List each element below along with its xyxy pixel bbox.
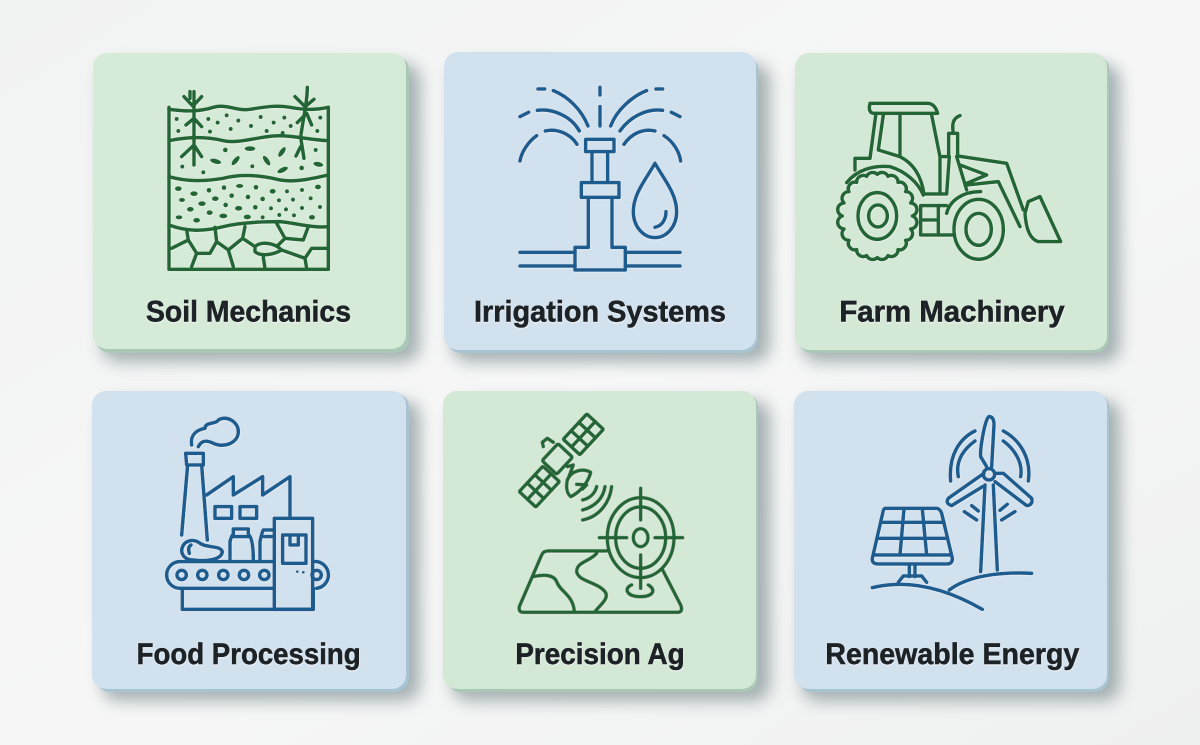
panel: irrigation systems	[444, 52, 770, 362]
icon: food factory	[167, 418, 328, 609]
soil particles	[175, 113, 324, 223]
panel: food processing	[92, 391, 420, 701]
panel: renewable energy	[794, 391, 1120, 701]
icon: soil layers	[169, 87, 328, 269]
label: precision ag: Precision Ag	[515, 638, 685, 671]
icon: tractor with loader	[838, 103, 1061, 260]
label: food processing: Food Processing	[137, 638, 361, 671]
label: farm machinery: Farm Machinery	[839, 296, 1065, 329]
icon: solar panel and wind turbine	[872, 417, 1032, 609]
label: soil mechanics: Soil Mechanics	[146, 296, 351, 329]
panel: farm machinery	[795, 53, 1120, 362]
label: irrigation systems: Irrigation Systems	[474, 296, 726, 329]
icon: sprinkler with water drop	[520, 87, 681, 270]
panel: soil mechanics	[93, 53, 420, 362]
panel: precision ag	[443, 391, 770, 701]
label: renewable energy: Renewable Energy	[825, 638, 1080, 671]
icon: satellite over target map	[519, 414, 683, 612]
